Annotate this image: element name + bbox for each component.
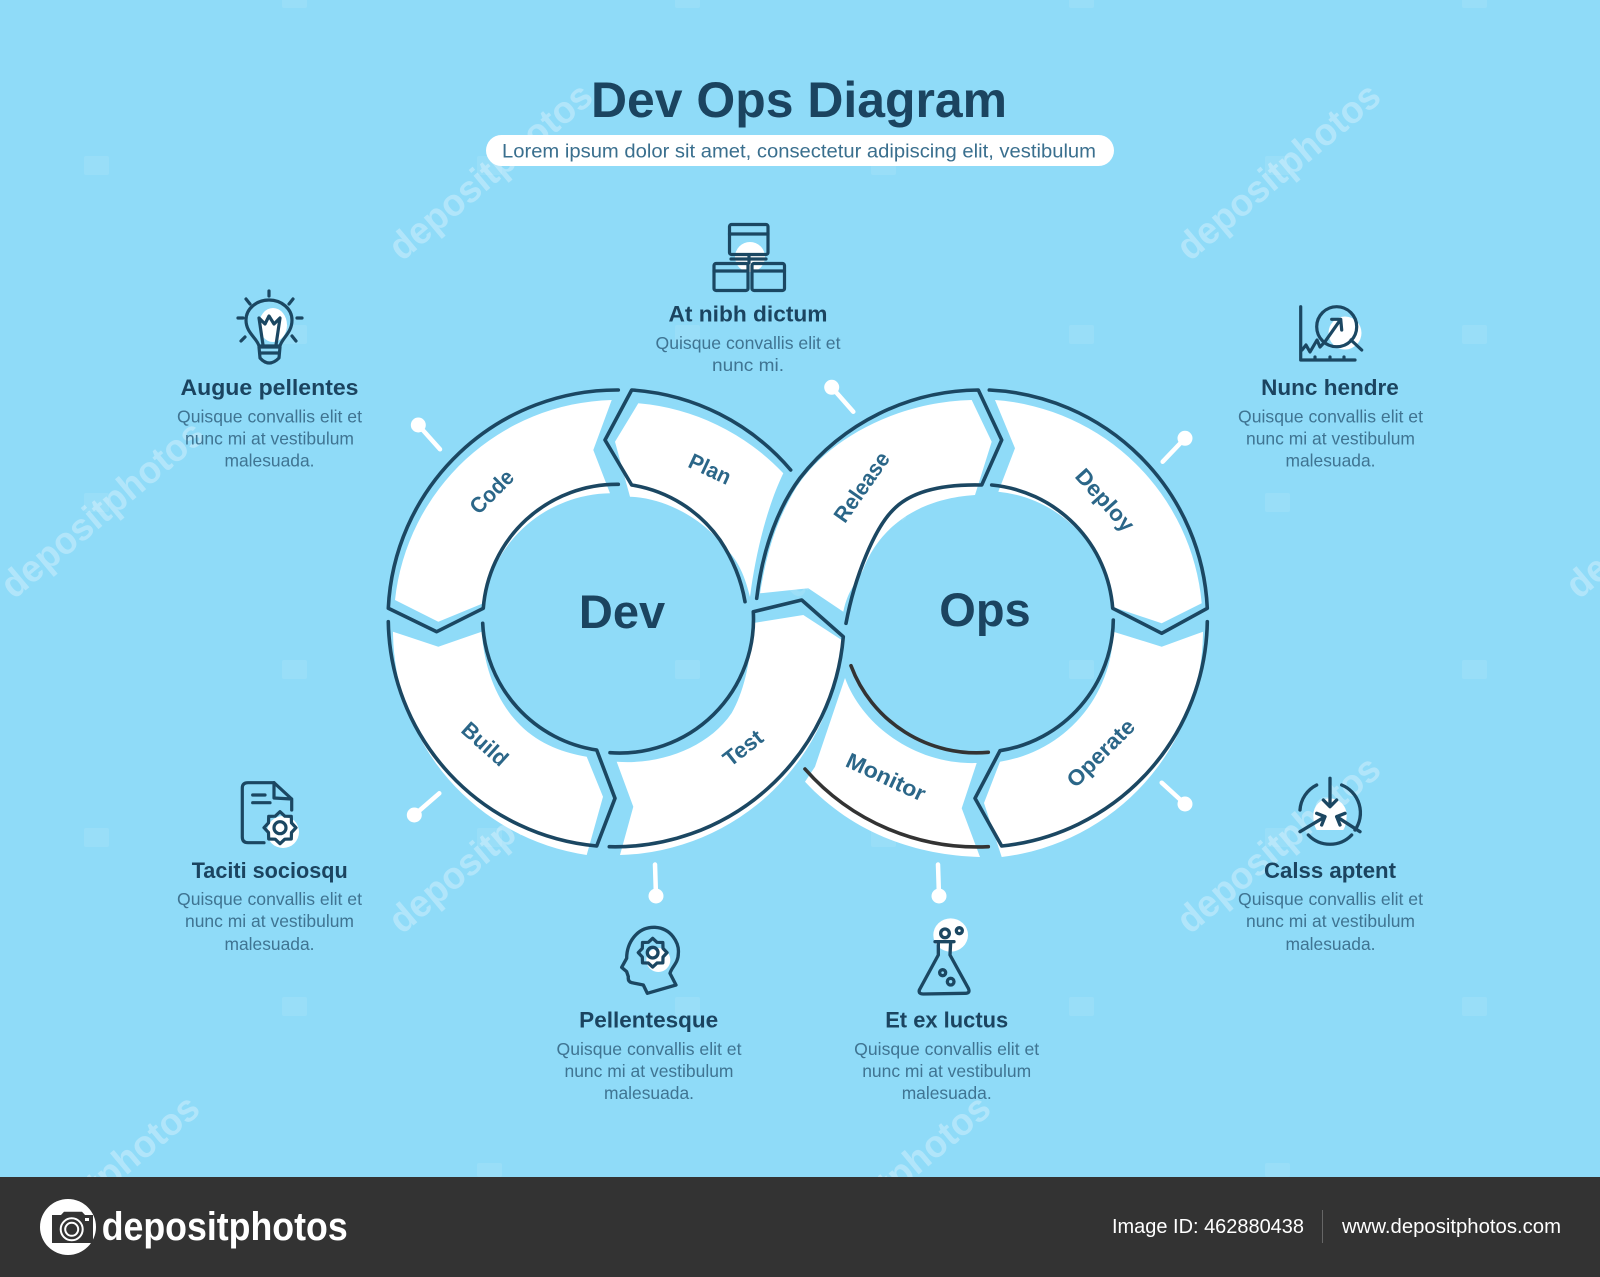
segment: Test [609,600,843,855]
block: Et ex luctus [854,918,1039,1103]
block: Taciti sociosqu: Taciti sociosqu [192,858,348,883]
icon: flask [919,918,969,994]
icon: document with gear [242,783,299,848]
subtitle pill: Lorem ipsum dolor sit amet, consectetur adipiscing elit, vestibulum [502,140,1096,162]
icon: arrows converging in circle [1300,778,1360,844]
block: Pellentesque: Quisque convallis elit et [556,1039,742,1059]
block: Pellentesque: malesuada. [604,1083,694,1103]
segment: Code: Code [464,464,519,519]
block: Taciti sociosqu: malesuada. [224,934,314,954]
block: Et ex luctus: malesuada. [902,1083,992,1103]
segment: Release: Release [829,447,895,527]
segment: Build [388,622,615,855]
segment: Plan: Plan [685,448,735,490]
footer bar: depositphotos [102,1205,348,1249]
center label: Ops: Ops [939,583,1031,636]
subtitle pill [486,135,1114,166]
block: Nunc hendre: nunc mi at vestibulum [1246,428,1415,448]
block: Augue pellentes: nunc mi at vestibulum [185,428,354,448]
block: Augue pellentes [177,291,362,470]
watermark layer: depositphotos [1169,748,1389,942]
segment: Deploy: Deploy [1070,463,1140,537]
block: Calss aptent: malesuada. [1286,934,1376,954]
block: At nibh dictum: Quisque convallis elit et [656,333,841,353]
segment: Test: Test [718,724,769,771]
segment: Build: Build [457,717,513,771]
block: Pellentesque [556,927,742,1103]
block: Nunc hendre [1238,307,1423,470]
block: Pellentesque: Pellentesque [579,1008,718,1033]
watermark layer: depositphotos [381,748,601,942]
segment: Monitor [805,666,988,857]
footer bar: Image ID: 462880438 [1112,1216,1304,1238]
segment: Operate [975,620,1207,857]
segment: Release [757,390,1002,623]
watermark layer: depositphotos [775,413,995,607]
block: Calss aptent: Calss aptent [1264,858,1397,883]
icon: light bulb [238,291,302,363]
segment: Code [388,390,618,632]
block: Nunc hendre: Nunc hendre [1261,375,1399,400]
center label: Dev: Dev [579,585,665,638]
connector pins [407,380,1192,904]
footer bar [0,1177,1600,1277]
block: Taciti sociosqu: Quisque convallis elit et [177,889,362,909]
watermark layer: depositphotos [779,1087,999,1277]
block: Calss aptent [1238,778,1423,954]
block: Taciti sociosqu: nunc mi at vestibulum [185,911,354,931]
block: Et ex luctus: Quisque convallis elit et [854,1039,1039,1059]
block: At nibh dictum: nunc mi. [712,355,784,375]
block: Calss aptent: Quisque convallis elit et [1238,889,1423,909]
segment: Plan [605,390,791,602]
block: Nunc hendre: malesuada. [1286,450,1376,470]
icon: depositphotos logo [40,1199,96,1255]
block: Nunc hendre: Quisque convallis elit et [1238,407,1423,427]
watermark layer: depositphotos [1169,75,1389,269]
footer bar: www.depositphotos.com [1341,1216,1561,1238]
segment: Operate: Operate [1061,714,1140,792]
icon: network boxes [714,224,784,290]
segment: Deploy [989,390,1207,633]
block: Augue pellentes: Quisque convallis elit et [177,407,362,427]
block: At nibh dictum: At nibh dictum [668,302,828,326]
block: Augue pellentes: Augue pellentes [180,375,358,400]
icon: chart with magnifier [1301,307,1362,360]
block: At nibh dictum [656,224,841,375]
icon: head with gear [622,927,678,993]
block: Taciti sociosqu [177,783,362,954]
watermark layer: depositphotos [381,75,601,269]
block: Et ex luctus: Et ex luctus [885,1008,1008,1033]
segment: Monitor: Monitor [842,748,930,806]
block: Calss aptent: nunc mi at vestibulum [1246,911,1415,931]
block: Et ex luctus: nunc mi at vestibulum [862,1061,1031,1081]
block: Augue pellentes: malesuada. [224,450,314,470]
block: Pellentesque: nunc mi at vestibulum [564,1061,734,1081]
title: Dev Ops Diagram [591,72,1007,128]
